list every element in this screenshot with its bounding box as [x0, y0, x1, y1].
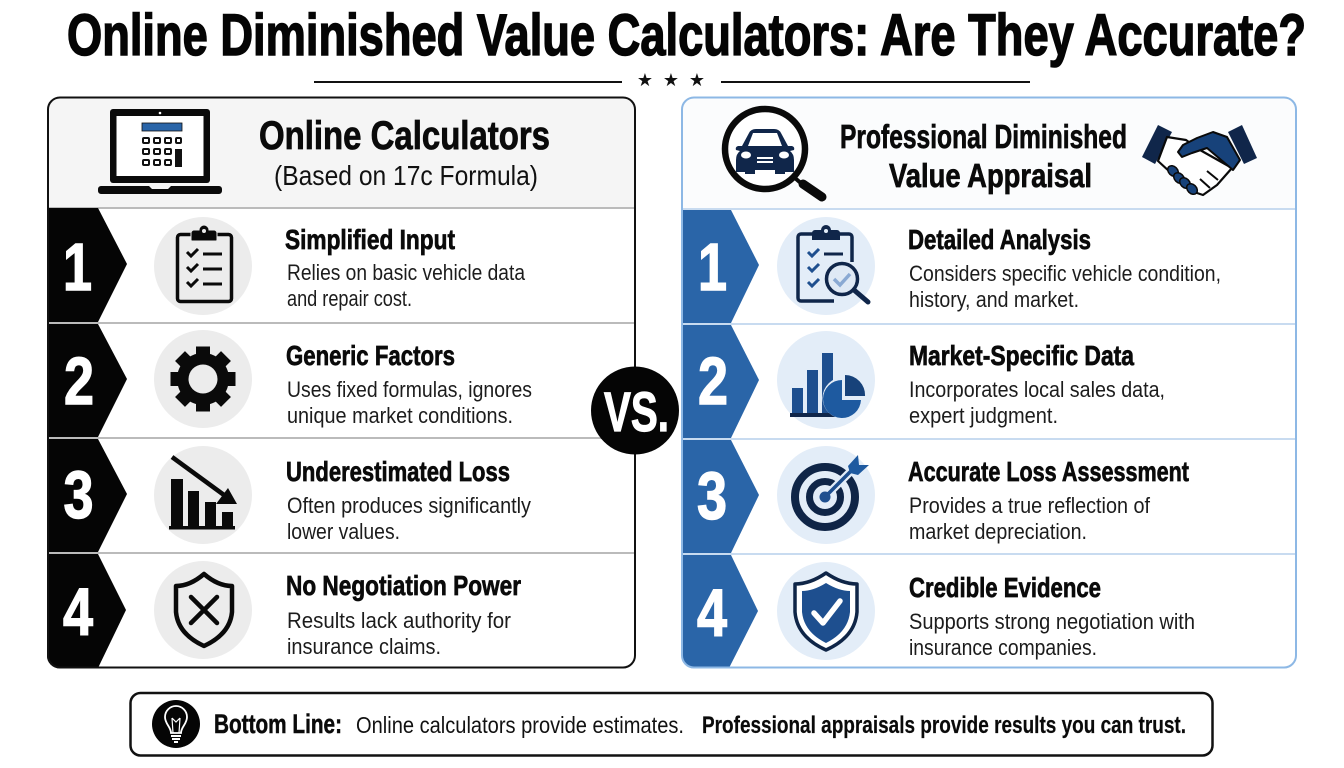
title divider with stars: ★: [689, 70, 705, 91]
number badge 1: 1: [63, 230, 92, 305]
heading: No Negotiation Power: [286, 570, 521, 601]
heading: Accurate Loss Assessment: [908, 456, 1189, 487]
description line 2: insurance companies.: [909, 635, 1097, 660]
icon: checklist clipboard: [154, 217, 252, 315]
description: Supports strong negotiation with: [909, 609, 1195, 634]
icon: target with arrow: [777, 446, 875, 544]
number badge 4: [47, 554, 126, 668]
icon: light bulb: [152, 700, 200, 748]
description: Relies on basic vehicle data: [287, 260, 526, 285]
row 3 left: [47, 439, 531, 552]
icon: bars and pie chart: [777, 331, 875, 429]
description line 2: history, and market.: [909, 287, 1079, 312]
icon: declining bar chart: [154, 446, 252, 544]
vs badge: [591, 366, 679, 454]
description: Provides a true reflection of: [909, 493, 1151, 518]
panel: professional appraisal: [682, 97, 1296, 668]
panel subheading: (Based on 17c Formula): [274, 160, 538, 191]
number badge 2: [682, 325, 759, 438]
number badge 3: 3: [697, 459, 727, 534]
statement: online calculators: Online calculators provide estimates.: [356, 712, 684, 738]
description: Uses fixed formulas, ignores: [287, 377, 532, 402]
title divider with stars: ★: [663, 70, 679, 91]
row 2 right: [682, 325, 1165, 438]
number badge 2: [47, 324, 127, 437]
number badge 4: 4: [697, 576, 727, 651]
label: bottom line: Bottom Line:: [214, 709, 342, 739]
statement: professional appraisals: Professional appraisals provide results you can trust.: [702, 712, 1186, 739]
row 4 right: [682, 555, 1195, 668]
description line 2: insurance claims.: [287, 634, 441, 659]
description: Results lack authority for: [287, 608, 511, 633]
number badge 3: [47, 439, 127, 552]
number badge 3: 3: [64, 458, 94, 533]
row 4 left: [47, 554, 521, 668]
description line 2: market depreciation.: [909, 519, 1087, 544]
icon: clipboard with magnifier: [777, 217, 875, 315]
description: Often produces significantly: [287, 493, 531, 518]
heading: Simplified Input: [285, 224, 455, 255]
number badge 4: [682, 555, 758, 668]
panel heading: online calculators: Online Calculators: [259, 114, 550, 158]
icon: handshake: [1142, 125, 1257, 196]
icon: shield with check: [777, 562, 875, 660]
icon: car in magnifier: [725, 109, 822, 197]
description line 2: and repair cost.: [287, 286, 412, 311]
icon: gear: [154, 330, 252, 428]
row 1 right: [682, 210, 1221, 323]
title divider with stars: [314, 70, 1030, 91]
description: Incorporates local sales data,: [909, 377, 1165, 402]
number badge 2: 2: [698, 344, 728, 419]
panel heading line 2: Value Appraisal: [889, 157, 1092, 194]
row 2 left: [47, 324, 532, 437]
icon: laptop calculator: [98, 109, 222, 194]
title divider with stars: ★: [637, 70, 653, 91]
number badge 1: 1: [698, 230, 727, 305]
number badge 2: 2: [64, 344, 94, 419]
description line 2: unique market conditions.: [287, 403, 513, 428]
row 1 left: [47, 208, 526, 322]
panel heading line 1: Professional Diminished: [840, 118, 1127, 155]
number badge 1: [47, 208, 127, 322]
callout: bottom line: [130, 693, 1212, 756]
heading: Generic Factors: [286, 340, 455, 371]
heading: Credible Evidence: [909, 572, 1101, 603]
description line 2: expert judgment.: [909, 403, 1058, 428]
panel: online calculators: [47, 97, 635, 668]
vs badge: VS.: [604, 380, 669, 443]
number badge 1: [682, 210, 759, 323]
number badge 3: [682, 440, 759, 553]
description: Considers specific vehicle condition,: [909, 261, 1221, 286]
description line 2: lower values.: [287, 519, 400, 544]
heading: Detailed Analysis: [908, 224, 1091, 255]
row 3 right: [682, 440, 1189, 553]
icon: shield with x: [154, 561, 252, 659]
heading: Underestimated Loss: [286, 456, 510, 487]
heading: Market-Specific Data: [909, 340, 1134, 371]
number badge 4: 4: [63, 575, 93, 650]
